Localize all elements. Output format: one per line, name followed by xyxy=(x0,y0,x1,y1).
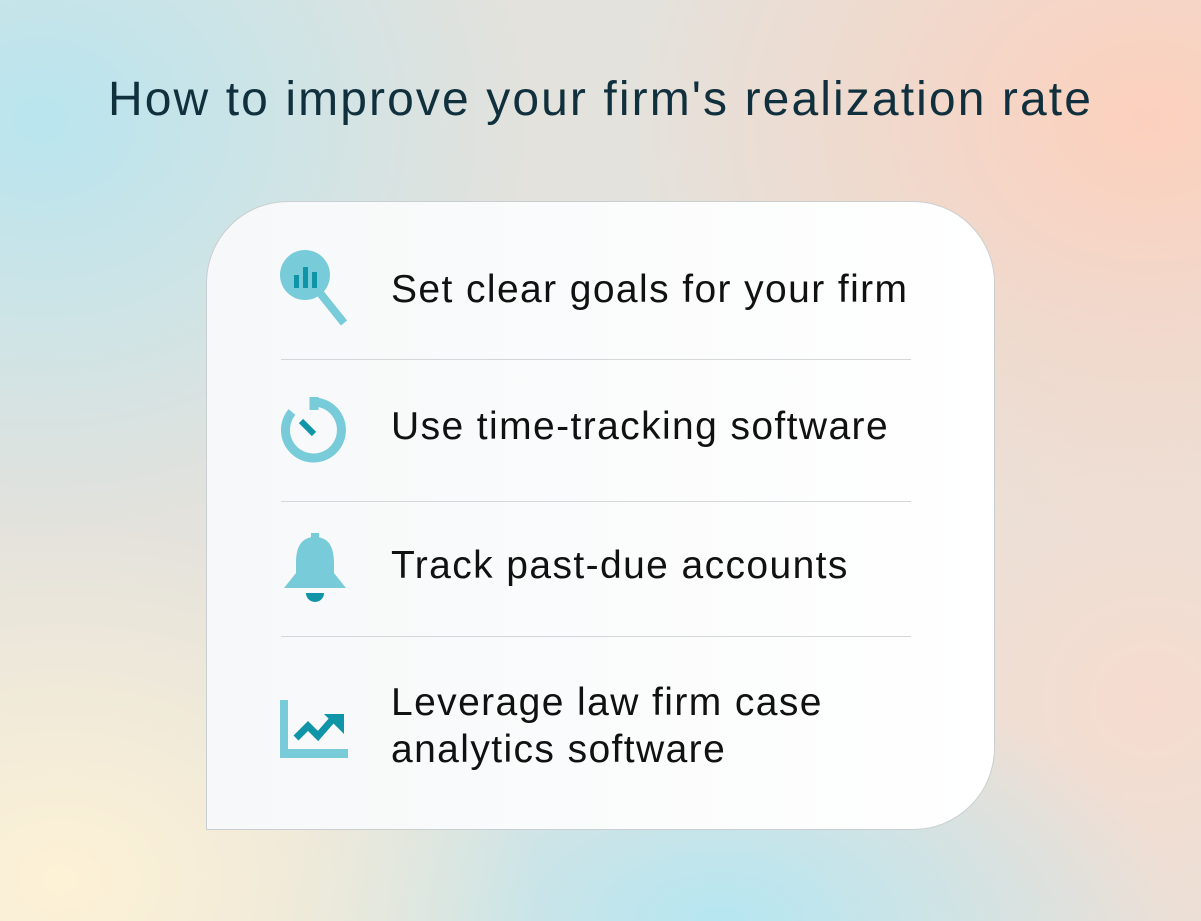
icon: timer xyxy=(280,397,346,462)
panel: card xyxy=(206,201,995,830)
text: row 4 xyxy=(391,681,823,771)
text: row 4: Leverage law firm case xyxy=(391,681,823,724)
icon: analytics chart xyxy=(280,700,348,758)
icon: magnifier chart xyxy=(280,250,347,326)
text: row 2: Use time-tracking software xyxy=(391,405,889,448)
icon: bell xyxy=(284,533,346,602)
text: row 4: analytics software xyxy=(391,728,726,771)
text: row 3: Track past-due accounts xyxy=(391,544,849,587)
text: row 1: Set clear goals for your firm xyxy=(391,268,908,311)
title: How to improve your firm's realization rate xyxy=(108,73,1093,126)
